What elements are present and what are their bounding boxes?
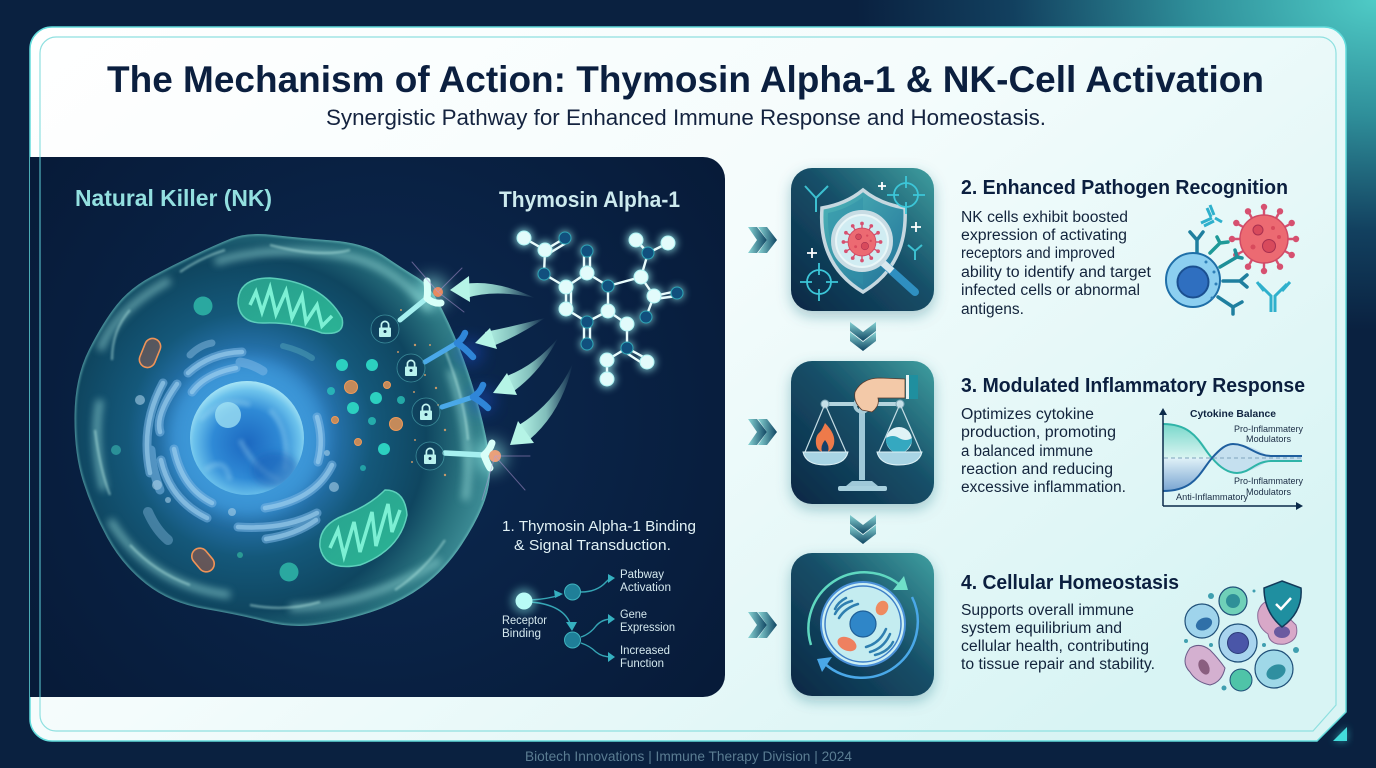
signal pathway diagram: Receptor bbox=[502, 615, 547, 627]
body: step 4: cellular health, contributing bbox=[961, 638, 1149, 655]
body: step 3: reaction and reducing bbox=[961, 461, 1113, 478]
chart: cytokine balance: Pro-Inflammatery bbox=[1234, 424, 1303, 435]
title: The Mechanism of Action: Thymosin Alpha-1 & NK-Cell Activation bbox=[107, 59, 1264, 100]
signal pathway diagram: Increased bbox=[620, 645, 670, 657]
chart: cytokine balance: Cytokine Balance bbox=[1190, 408, 1276, 420]
icon: cellular homeostasis bbox=[791, 553, 934, 696]
small organelles and granules bbox=[111, 296, 446, 582]
signal pathway diagram: Expression bbox=[620, 622, 675, 634]
body: step 2: ability to identify and target bbox=[961, 264, 1152, 281]
body: step 2 bbox=[961, 209, 1152, 318]
arrow: chevrons to step 3 bbox=[748, 419, 777, 445]
chart: cytokine balance: Anti-Inflammatory bbox=[1176, 492, 1248, 503]
heading: step 3: 3. Modulated Inflammatory Response bbox=[961, 375, 1305, 397]
body: step 4: Supports overall immune bbox=[961, 602, 1134, 619]
step 4 text bbox=[961, 572, 1179, 673]
body: step 4: system equilibrium and bbox=[961, 620, 1122, 637]
corner accent triangle bbox=[1333, 727, 1347, 741]
signal pathway diagram: Activation bbox=[620, 582, 671, 594]
body: step 3: excessive inflammation. bbox=[961, 479, 1126, 496]
illustration: healthy immune cells with shield bbox=[1184, 581, 1301, 691]
body: step 2: infected cells or abnormal bbox=[961, 282, 1140, 299]
signal pathway diagram: Patbway bbox=[620, 569, 664, 581]
signal pathway diagram: Binding bbox=[502, 628, 541, 640]
nucleus bbox=[190, 381, 304, 495]
body: step 3: a balanced immune bbox=[961, 443, 1093, 460]
arrow: step 2 down to step 3 bbox=[850, 322, 876, 351]
arrow: chevrons to step 2 bbox=[748, 227, 777, 253]
NK cell illustration bbox=[74, 234, 490, 626]
chart: cytokine balance: Modulators bbox=[1246, 434, 1291, 445]
endoplasmic reticulum bbox=[135, 343, 339, 540]
body: step 4: to tissue repair and stability. bbox=[961, 656, 1155, 673]
chart: cytokine balance: Modulators bbox=[1246, 487, 1291, 498]
receptor locks bbox=[371, 315, 444, 470]
body: step 3: Optimizes cytokine bbox=[961, 406, 1094, 423]
step 1 text bbox=[502, 518, 696, 554]
body: step 3 bbox=[961, 406, 1126, 496]
panel: NK cell mechanism bbox=[30, 157, 725, 697]
signal pathway diagram: Gene bbox=[620, 609, 647, 621]
nucleus glow bbox=[169, 360, 325, 516]
chart: cytokine balance bbox=[1159, 408, 1303, 510]
signal pathway diagram bbox=[502, 569, 675, 670]
body: step 2: NK cells exhibit boosted bbox=[961, 209, 1128, 226]
arrow: step 3 down to step 4 bbox=[850, 515, 876, 544]
subtitle: Synergistic Pathway for Enhanced Immune Response and Homeostasis. bbox=[326, 105, 1046, 130]
body: step 2: receptors and improved bbox=[961, 245, 1115, 262]
body: step 4 bbox=[961, 602, 1155, 673]
step 2 text bbox=[961, 177, 1288, 318]
arrow: chevrons to step 4 bbox=[748, 612, 777, 638]
footer: Biotech Innovations | Immune Therapy Division | 2024 bbox=[525, 748, 852, 764]
illustration: NK cell targeting virus bbox=[1166, 204, 1299, 314]
mitochondria bbox=[238, 278, 407, 567]
body: step 3: production, promoting bbox=[961, 424, 1116, 441]
arrows: molecule to receptors bbox=[450, 276, 573, 445]
chart: cytokine balance: Pro-Inflammatery bbox=[1234, 476, 1303, 487]
step 1 text: 1. Thymosin Alpha-1 Binding bbox=[502, 518, 696, 535]
receptors on membrane bbox=[400, 262, 530, 500]
icon: pathogen recognition bbox=[791, 168, 934, 311]
heading: Natural Killer: Natural Killer (NK) bbox=[75, 185, 272, 211]
signal pathway diagram: Function bbox=[620, 658, 664, 670]
body: step 2: antigens. bbox=[961, 301, 1024, 318]
heading: step 4: 4. Cellular Homeostasis bbox=[961, 572, 1179, 594]
Thymosin Alpha-1 molecule bbox=[515, 229, 684, 388]
heading: Thymosin Alpha-1: Thymosin Alpha-1 bbox=[499, 187, 680, 212]
step 1 text: & Signal Transduction. bbox=[514, 537, 671, 554]
icon: balance scale bbox=[791, 361, 934, 504]
step 3 text bbox=[961, 375, 1305, 496]
heading: step 2: 2. Enhanced Pathogen Recognition bbox=[961, 177, 1288, 199]
body: step 2: expression of activating bbox=[961, 227, 1127, 244]
